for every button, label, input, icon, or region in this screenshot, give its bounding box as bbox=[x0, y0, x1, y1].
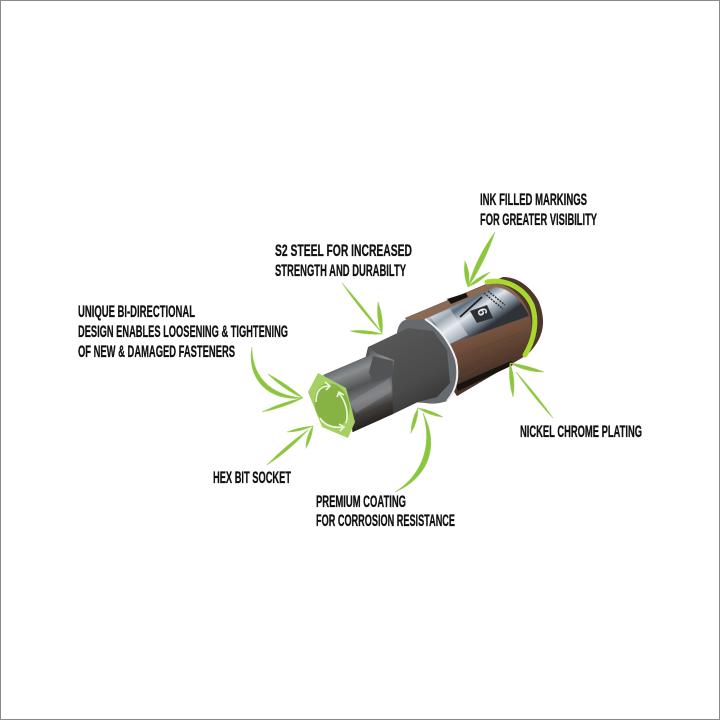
label: bi-directional design bbox=[78, 303, 288, 361]
arrow: bi-directional design bbox=[251, 347, 303, 412]
collar bbox=[395, 319, 457, 404]
label: s2 steel: STRENGTH AND DURABILTY bbox=[275, 262, 406, 280]
socket end face bbox=[308, 373, 355, 438]
ink filled markings bbox=[447, 291, 505, 323]
label: s2 steel: S2 STEEL FOR INCREASED bbox=[275, 242, 412, 260]
rotation arrows bbox=[316, 382, 347, 431]
arrow: s2 steel bbox=[342, 283, 382, 334]
arrow: nickel chrome plating bbox=[509, 363, 553, 418]
label: bi-directional design: OF NEW & DAMAGED FASTENERS bbox=[78, 343, 235, 361]
green marking ring bbox=[487, 281, 535, 355]
torx bit body bbox=[323, 347, 394, 432]
label: bi-directional design: DESIGN ENABLES LOOSENING & TIGHTENING bbox=[78, 323, 288, 341]
label: premium coating bbox=[316, 493, 455, 530]
label: premium coating: FOR CORROSION RESISTANCE bbox=[316, 512, 455, 530]
bit lobes bbox=[369, 356, 393, 383]
hex shank bbox=[352, 328, 450, 432]
socket tool illustration bbox=[308, 277, 543, 438]
label: hex bit socket: HEX BIT SOCKET bbox=[213, 469, 291, 487]
label: ink filled markings: INK FILLED MARKINGS bbox=[480, 191, 587, 209]
label: ink filled markings bbox=[480, 191, 597, 229]
arrow: hex bit socket bbox=[267, 426, 313, 465]
label: ink filled markings: FOR GREATER VISIBILITY bbox=[480, 211, 597, 229]
label: bi-directional design: UNIQUE BI-DIRECTIONAL bbox=[78, 303, 195, 321]
arrow: ink filled markings bbox=[464, 232, 495, 287]
ink filled markings: 6 bbox=[474, 306, 491, 318]
arrow: premium coating bbox=[395, 408, 443, 492]
label: premium coating: PREMIUM COATING bbox=[316, 493, 406, 511]
label: s2 steel bbox=[275, 242, 412, 280]
cylinder body bbox=[405, 277, 543, 396]
